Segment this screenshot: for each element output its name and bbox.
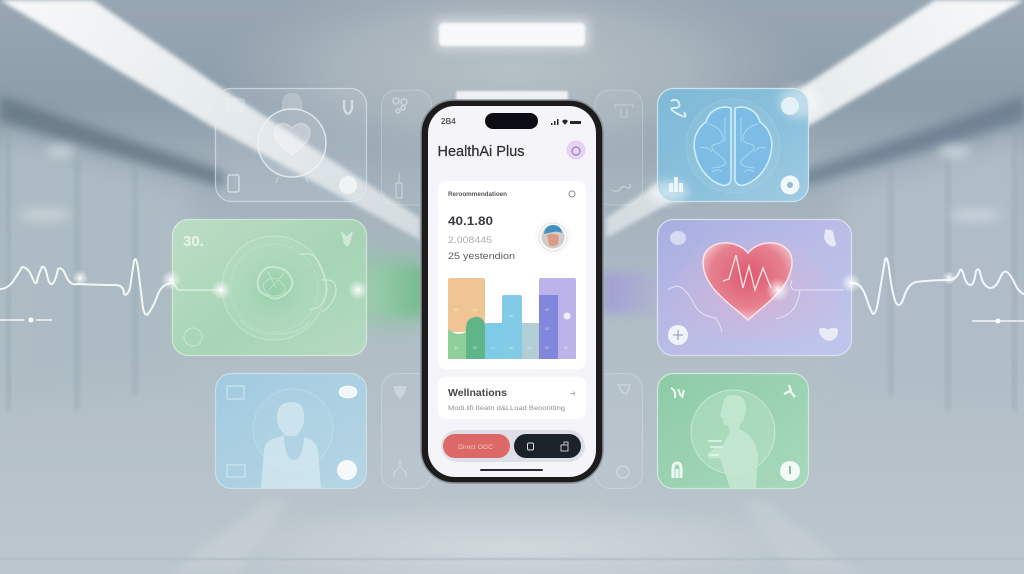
- status bar: [441, 113, 581, 129]
- bar value labels: 30: [473, 345, 478, 350]
- icon: profile button: [566, 140, 586, 160]
- bar value labels: 00: [454, 307, 459, 312]
- icon: arrow: [570, 392, 575, 396]
- illustration: brain: [694, 107, 772, 185]
- time: 2B4: [441, 117, 456, 126]
- title: HealthAi Plus: [438, 143, 524, 160]
- bar value labels: 00: [545, 307, 550, 312]
- bar value labels: 30: [509, 345, 514, 350]
- illustration: figure with heart: [258, 93, 326, 183]
- panel: faint top left: [382, 90, 432, 205]
- icon: ring: [617, 466, 629, 478]
- icon: white marker button: [781, 97, 799, 115]
- glow nodes: [72, 270, 88, 286]
- icon: toolbox: [227, 465, 245, 477]
- icon: leaf: [341, 231, 353, 247]
- panel: brain, top right: [648, 86, 820, 203]
- arcs inside panel: [668, 280, 844, 332]
- icon: settings: [569, 191, 575, 197]
- panel: faint bottom right: [595, 374, 642, 488]
- avatar: [535, 219, 571, 255]
- icon: white heart pill: [338, 386, 358, 398]
- panel glare top right: [780, 86, 820, 118]
- icon: heart shield: [393, 386, 407, 399]
- bar value labels: 00: [509, 313, 514, 318]
- icon: phone tablet: [228, 175, 239, 192]
- bar value labels: [454, 307, 569, 350]
- pulse line right: [605, 258, 1024, 324]
- icon: badge: [618, 385, 630, 394]
- icon: kidney: [824, 230, 836, 247]
- icon: infinity ring: [184, 328, 202, 346]
- icon: molecule: [671, 100, 686, 117]
- pulse line left: [0, 259, 420, 322]
- metric note: 25 yestendion: [448, 251, 515, 262]
- ceiling light behind phone: [456, 91, 568, 103]
- icon: stethoscope: [344, 100, 352, 114]
- icon: white dot button: [339, 176, 357, 194]
- phone screen: [428, 106, 596, 477]
- metric subvalue: 2.008445: [448, 235, 492, 245]
- icon: arch: [673, 463, 681, 478]
- card: wellnations: [438, 377, 586, 419]
- icon: lungs: [819, 328, 838, 341]
- bar value labels: 20: [527, 345, 532, 350]
- illustration: woman figure: [253, 389, 333, 488]
- card: recommendations and chart: [438, 181, 586, 369]
- icon: white dot button: [337, 460, 357, 480]
- icon: monitor: [227, 386, 244, 399]
- bar chart: [448, 278, 576, 359]
- signal icons: [551, 119, 581, 125]
- button: red: [443, 434, 510, 458]
- phone body: [421, 100, 603, 483]
- panel: profile body, bottom right: [658, 374, 808, 488]
- phone: [421, 100, 603, 483]
- icon: planet: [670, 231, 686, 245]
- card heading: Wellnations: [448, 387, 507, 399]
- icon: network: [394, 459, 406, 478]
- metric value: 40.1.80: [448, 214, 493, 228]
- bar value labels: 30: [545, 345, 550, 350]
- icon: bottle: [396, 173, 402, 198]
- panel: faint top right: [595, 90, 642, 205]
- icon: molecules: [393, 98, 407, 113]
- illustration: organ in sphere: [222, 236, 336, 340]
- panel: faint bottom left: [382, 374, 432, 488]
- icon: white info button: [780, 461, 800, 481]
- dynamic island: [485, 113, 538, 129]
- panel glare bottom left: [648, 181, 688, 203]
- card description: Modi.lifi Iteatn d&LLoad Beoontting: [448, 405, 565, 412]
- button: dark with icons: [514, 434, 581, 458]
- panel: body, bottom left: [216, 374, 366, 488]
- icon: card: [226, 99, 244, 112]
- glow nodes: [841, 273, 861, 293]
- icon: bar chart: [669, 177, 683, 192]
- illustration: human profile: [691, 390, 775, 488]
- glow dome: [666, 225, 844, 338]
- icon: bracket: [615, 105, 633, 117]
- ceiling light strip left: [0, 0, 420, 240]
- icon: white plus button: [668, 325, 688, 345]
- home indicator: [480, 469, 543, 471]
- ceiling light center: [434, 18, 590, 50]
- card heading: Reroommendatioen: [448, 191, 507, 198]
- bar value labels: 30: [454, 345, 459, 350]
- panel: heart rate, middle right: [658, 220, 852, 356]
- bar value labels: 21: [491, 345, 496, 350]
- action bar: [441, 430, 585, 462]
- bar value labels: 00: [473, 307, 478, 312]
- ceiling light strip right: [606, 0, 1024, 238]
- button: red: Direct OGC: [458, 444, 493, 451]
- panel: heart scan, top left: [216, 88, 366, 202]
- wifi: [562, 120, 568, 125]
- bar value labels: 00: [545, 326, 550, 331]
- illustration: heart with pulse: [703, 243, 792, 320]
- icon: runner: [784, 385, 795, 397]
- bar value labels: 30: [564, 345, 569, 350]
- label: score: 30.: [183, 233, 204, 250]
- panel: green metabolism, middle left: [172, 220, 366, 356]
- icon: hands: [671, 388, 684, 398]
- icon: white ring button: [780, 176, 800, 194]
- icon: wave: [612, 184, 630, 191]
